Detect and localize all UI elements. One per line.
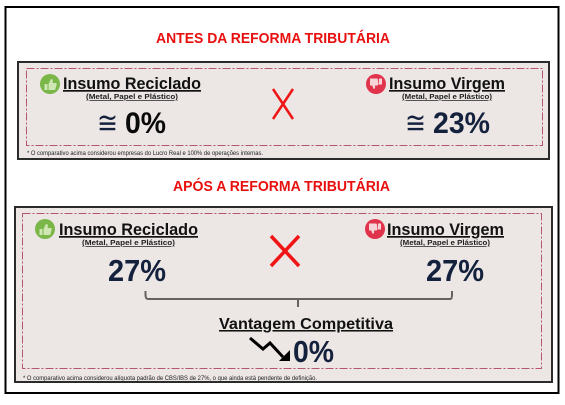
virgin input rate: 27% bbox=[426, 253, 484, 288]
recycled input subtitle: (Metal, Papel e Plástico) bbox=[86, 92, 179, 101]
competitive advantage rate: 0% bbox=[293, 334, 334, 369]
icon: thumbs up bbox=[35, 219, 55, 239]
panel: after the reform bbox=[15, 207, 552, 382]
virgin input subtitle: (Metal, Papel e Plástico) bbox=[402, 92, 493, 101]
bracket connecting both rates bbox=[146, 291, 452, 307]
competitive advantage heading: Vantagem Competitiva bbox=[219, 316, 393, 333]
virgin input heading: Insumo Virgem bbox=[389, 75, 505, 93]
recycled input rate: 0% bbox=[125, 107, 166, 140]
icon: downward trend arrow bbox=[250, 338, 290, 361]
footnote: * O comparativo acima considerou alíquota padrão de CBS/IBS de 27%, o que ainda está pendente de definição. bbox=[23, 376, 317, 382]
icon: thumbs down bbox=[366, 74, 386, 94]
virgin input heading: Insumo Virgem bbox=[387, 220, 504, 239]
recycled input subtitle: (Metal, Papel e Plástico) bbox=[82, 238, 176, 247]
recycled input heading: Insumo Reciclado bbox=[59, 220, 198, 239]
icon: X versus mark bbox=[271, 236, 299, 266]
recycled input heading: Insumo Reciclado bbox=[63, 74, 201, 93]
virgin input rate: ≅ bbox=[405, 107, 426, 140]
virgin input rate bbox=[405, 107, 490, 140]
virgin input subtitle: (Metal, Papel e Plástico) bbox=[400, 238, 491, 247]
panel: before the reform bbox=[18, 62, 549, 159]
recycled input rate: ≅ bbox=[97, 107, 118, 140]
footnote: * O comparativo acima considerou empresas do Lucro Real e 100% de operações internas. bbox=[27, 151, 263, 157]
virgin input rate: 23% bbox=[433, 107, 490, 140]
icon: X versus mark bbox=[273, 89, 293, 119]
recycled input rate bbox=[97, 107, 166, 140]
icon: thumbs down bbox=[365, 219, 385, 239]
title: after the reform: APÓS A REFORMA TRIBUTÁRIA bbox=[173, 177, 390, 195]
recycled input rate: 27% bbox=[108, 253, 166, 288]
icon: thumbs up bbox=[40, 74, 60, 94]
title: before the reform: ANTES DA REFORMA TRIBUTÁRIA bbox=[156, 30, 390, 47]
